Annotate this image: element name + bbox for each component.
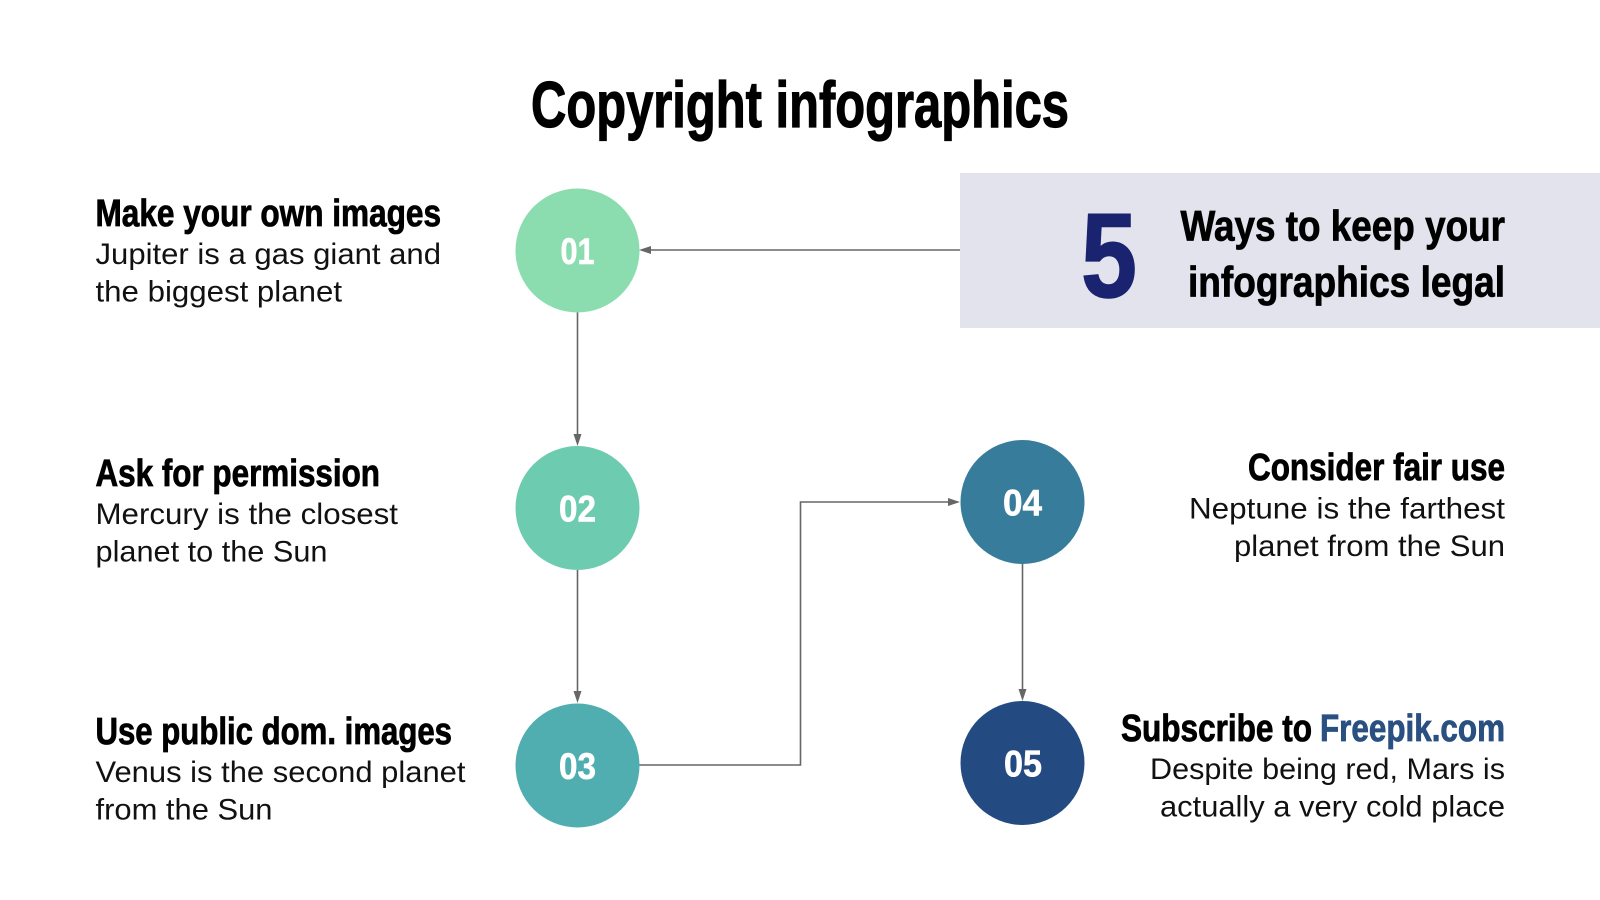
circle 03	[516, 704, 640, 828]
arrow: banner to 01	[639, 246, 960, 254]
text block: consider fair use: Consider fair use	[1248, 447, 1505, 489]
banner heading	[1180, 202, 1505, 306]
arrow: 03 to 04	[639, 498, 960, 765]
circle 03: 03	[559, 746, 596, 787]
text block: subscribe to freepik: Freepik.com	[1320, 708, 1505, 750]
circle 04: 04	[1003, 482, 1042, 524]
text block: consider fair use: planet from the Sun	[1234, 530, 1505, 563]
circle 01: 01	[560, 231, 594, 272]
text block: subscribe to freepik: Despite being red, Mars is	[1150, 753, 1505, 786]
text block: ask for permission: Mercury is the closest	[96, 498, 399, 531]
big number 5: 5	[1081, 189, 1137, 323]
circle 01	[516, 188, 640, 312]
text block: subscribe to freepik: actually a very cold place	[1160, 790, 1505, 824]
text block: make your own images: Jupiter is a gas giant and	[96, 238, 441, 271]
text block: consider fair use: Neptune is the farthest	[1189, 492, 1506, 526]
text block: make your own images: the biggest planet	[96, 276, 343, 308]
circle 02: 02	[559, 488, 596, 530]
arrow: 02 to 03	[574, 570, 582, 703]
title: Copyright infographics	[531, 68, 1069, 141]
text block: subscribe to freepik	[1121, 708, 1505, 824]
text block: use public domain images: Use public dom. images	[96, 711, 452, 753]
circle 04	[960, 440, 1084, 564]
arrow: 01 to 02	[574, 312, 582, 446]
text block: use public domain images: Venus is the second planet	[96, 756, 466, 789]
text block: ask for permission: Ask for permission	[96, 453, 380, 495]
text block: make your own images: Make your own images	[96, 193, 441, 235]
text block: use public domain images: from the Sun	[96, 794, 272, 826]
text block: use public domain images	[96, 711, 466, 826]
arrow: 04 to 05	[1018, 564, 1026, 701]
banner heading: Ways to keep your	[1180, 202, 1505, 250]
banner heading: infographics legal	[1188, 258, 1505, 306]
text block: consider fair use	[1189, 447, 1506, 563]
text block: make your own images	[96, 193, 441, 308]
circle 05	[960, 701, 1084, 825]
circle 05: 05	[1004, 744, 1042, 784]
panel: 5 ways banner	[960, 173, 1600, 328]
text block: subscribe to freepik: Subscribe to	[1121, 708, 1312, 750]
text block: ask for permission	[96, 453, 399, 568]
text block: ask for permission: planet to the Sun	[96, 536, 328, 568]
circle 02	[516, 446, 640, 570]
